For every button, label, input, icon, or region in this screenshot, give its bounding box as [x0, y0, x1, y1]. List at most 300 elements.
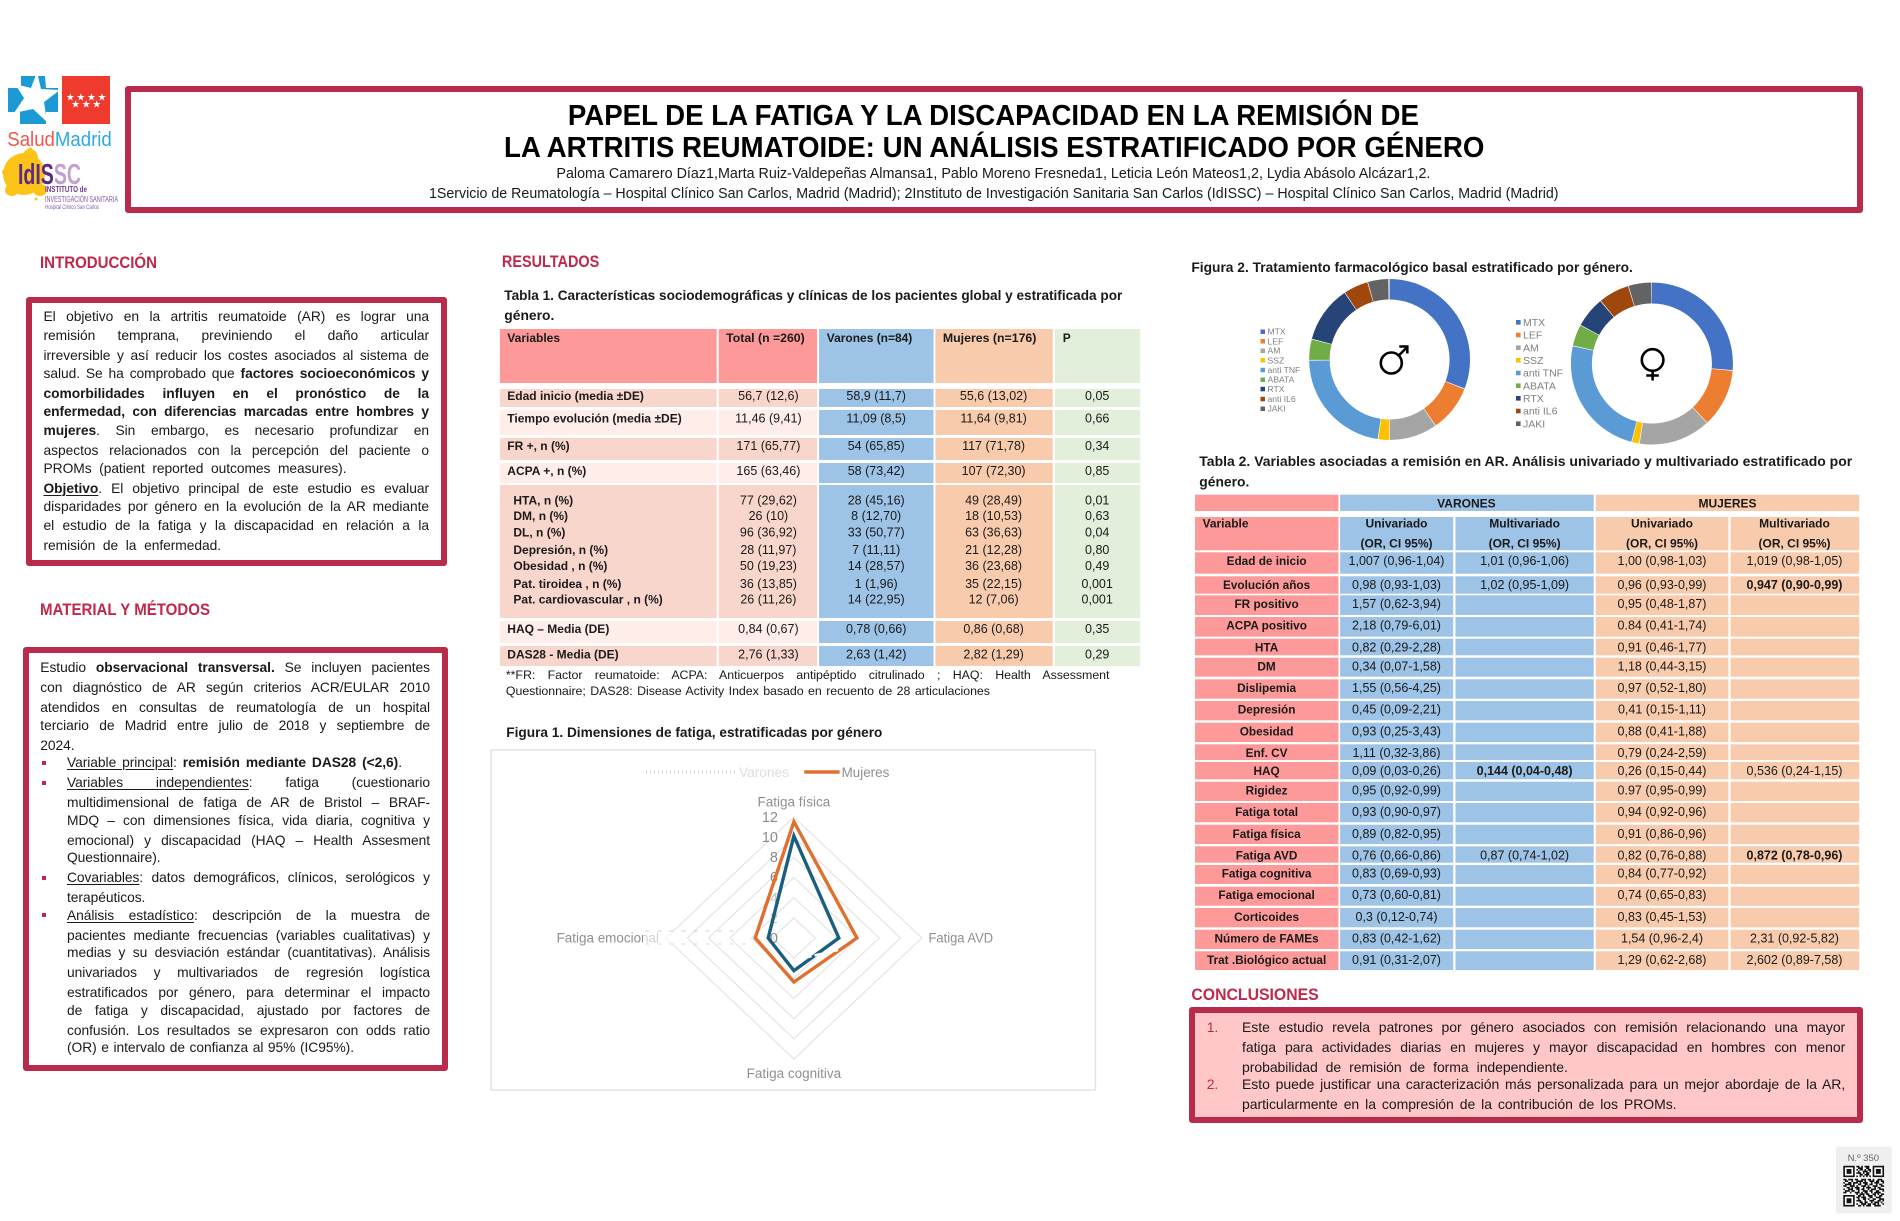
- row: ACPA: 107 (72,30): [962, 464, 1026, 478]
- row: evolución años: 1,02 (0,95-1,09): [1480, 578, 1569, 592]
- chart: female donut: [1516, 282, 1733, 444]
- row: fatiga AVD: Fatiga AVD: [1236, 848, 1298, 862]
- table 2 group header: [1195, 495, 1859, 511]
- panel: introducción: el estudio de la fatiga y la discapacidad en relación a la: [44, 518, 429, 533]
- row: ACPA positivo: 0.84 (0,41-1,74): [1618, 618, 1706, 632]
- panel: conclusiones: 1.: [1207, 1019, 1218, 1035]
- logo wordmark: SaludMadrid: [7, 129, 112, 151]
- row: enf CV: 0,79 (0,24-2,59): [1618, 746, 1706, 760]
- radar axis values: 2: [770, 911, 778, 927]
- table 2 group header: VARONES: [1437, 496, 1496, 510]
- chart frame: [491, 750, 1096, 1090]
- row: HTA: 0,91 (0,46-1,77): [1618, 640, 1706, 654]
- heading: introducción: INTRODUCCIÓN: [40, 253, 157, 272]
- row: DM: [1195, 658, 1859, 677]
- institute name: [45, 185, 118, 211]
- row: edad de inicio: 1,01 (0,96-1,06): [1480, 554, 1569, 568]
- row: edad de inicio: [1195, 552, 1859, 574]
- panel: material y métodos: Variable principal: remisión mediante DAS28 (<2,6).: [67, 755, 402, 770]
- row: evolución años: 0,947 (0,90-0,99): [1747, 578, 1842, 592]
- radar axis values: [762, 810, 778, 947]
- row: FR positivo: FR positivo: [1234, 597, 1299, 611]
- row: corticoides: [1195, 908, 1859, 927]
- row: tratamiento biológico: 0,91 (0,31-2,07): [1352, 953, 1441, 967]
- row: DAS28: 0,29: [1085, 648, 1109, 662]
- table 2 column header: [1195, 516, 1859, 550]
- row: fatiga AVD: 0,87 (0,74-1,02): [1480, 848, 1569, 862]
- category labels: Fatiga emocional: [557, 930, 659, 946]
- panel: material y métodos: atendidos en consultas de reumatología de un hospital: [40, 700, 430, 715]
- panel: material y métodos: Estudio observacional transversal. Se incluyen pacientes: [40, 660, 430, 675]
- legend female: anti IL6: [1523, 406, 1558, 418]
- title: [504, 98, 1484, 164]
- row: fatiga física: [1195, 825, 1859, 844]
- panel: conclusiones: 2.: [1207, 1076, 1218, 1092]
- row: comorbilidades: 14 (28,57): [848, 559, 905, 573]
- row: HAQ: 0,09 (0,03-0,26): [1352, 764, 1441, 778]
- row: evolución años: Evolución años: [1223, 578, 1311, 592]
- heading: tabla 1: Tabla 1. Características sociodemográficas y clínicas de los pacientes global y estratificada por: [504, 288, 1123, 303]
- panel: conclusiones: fatiga para actividades diarias en mujeres y mayor discapacidad en hombres con menor: [1242, 1039, 1845, 1055]
- row: ACPA: 0,85: [1085, 464, 1109, 478]
- logo: Salud Madrid: [7, 76, 112, 151]
- row: HAQ: [1195, 762, 1859, 779]
- title and authors: [429, 98, 1558, 202]
- legend female: AM: [1523, 342, 1539, 354]
- title: LA ARTRITIS REUMATOIDE: UN ANÁLISIS ESTRATIFICADO POR GÉNERO: [504, 130, 1484, 164]
- row: comorbilidades: 35 (22,15): [965, 577, 1022, 591]
- icon: female symbol: [1642, 349, 1663, 380]
- row: número de FAMEs: [1195, 930, 1859, 949]
- row: fatiga total: 0,94 (0,92-0,96): [1618, 805, 1706, 819]
- row: edad inicio: 0,05: [1085, 389, 1109, 403]
- row: HAQ: 0,78 (0,66): [846, 622, 906, 636]
- row: comorbilidades: Obesidad , n (%): [513, 559, 607, 573]
- row: DAS28: 2,82 (1,29): [963, 648, 1024, 662]
- icon: blue cross with star: [8, 72, 60, 124]
- series: mujeres: [755, 822, 857, 982]
- row: comorbilidades: 28 (45,16): [848, 494, 905, 508]
- row: comorbilidades: 14 (22,95): [848, 592, 905, 606]
- row: fatiga física: 0,89 (0,82-0,95): [1352, 827, 1441, 841]
- row: comorbilidades: 0,01: [1085, 494, 1109, 508]
- panel: material y métodos: Análisis estadístico: descripción de la muestra de: [67, 908, 430, 923]
- row: FR: 171 (65,77): [736, 439, 800, 453]
- row: fatiga AVD: 0,82 (0,76-0,88): [1618, 848, 1706, 862]
- legend: Mujeres: [842, 765, 890, 780]
- legend: [646, 765, 890, 780]
- donut segments female: [1581, 293, 1722, 434]
- table 1 header row: Total (n =260): [726, 331, 805, 345]
- title banner: [125, 86, 1863, 213]
- table 1 header row: Varones (n=84): [827, 331, 912, 345]
- panel: material y métodos: Covariables: datos demográficos, clínicos, serológicos y: [67, 870, 430, 885]
- row: depresión: 0,45 (0,09-2,21): [1352, 702, 1441, 716]
- heading: figura 1: Figura 1. Dimensiones de fatiga, estratificadas por género: [506, 725, 882, 740]
- row: comorbilidades: Pat. cardiovascular , n (%): [513, 592, 663, 606]
- row: dislipemia: Dislipemia: [1237, 681, 1297, 695]
- panel: conclusiones: Este estudio revela patrones por género asociados con remisión relacionando una mayor: [1242, 1019, 1845, 1035]
- row: edad de inicio: 1,007 (0,96-1,04): [1349, 554, 1444, 568]
- row: comorbilidades: 49 (28,49): [965, 494, 1022, 508]
- table 1 header row: Variables: [507, 331, 560, 345]
- row: dislipemia: 1,55 (0,56-4,25): [1352, 681, 1441, 695]
- icon: yellow splash: [2, 148, 47, 200]
- row: ACPA: [500, 463, 1140, 483]
- row: tratamiento biológico: 2,602 (0,89-7,58): [1747, 953, 1842, 967]
- row: edad de inicio: 1,00 (0,98-1,03): [1618, 554, 1706, 568]
- category labels: Fatiga AVD: [928, 930, 993, 946]
- panel: conclusiones: particularmente en la compresión de la contribución de los PROMs.: [1242, 1096, 1676, 1112]
- row: número de FAMEs: 0,83 (0,42-1,62): [1352, 932, 1441, 946]
- row: HTA: HTA: [1255, 640, 1279, 654]
- institute name: INVESTIGACIÓN SANITARIA: [45, 194, 118, 204]
- table 1 footnote: Questionnaire; DAS28: Disease Activity Index basado en recuento de 28 articulaciones: [506, 684, 990, 698]
- row: edad inicio: 55,6 (13,02): [960, 389, 1027, 403]
- heading: conclusiones: CONCLUSIONES: [1191, 986, 1319, 1004]
- table 2 column header: (OR, CI 95%): [1360, 536, 1433, 550]
- table 1 footnote: [506, 668, 1110, 698]
- legend female: anti TNF: [1523, 368, 1563, 380]
- legend male: AM: [1268, 346, 1280, 356]
- title: PAPEL DE LA FATIGA Y LA DISCAPACIDAD EN LA REMISIÓN DE: [568, 98, 1419, 132]
- legend male: [1260, 327, 1300, 414]
- row: edad de inicio: 1,019 (0,98-1,05): [1747, 554, 1842, 568]
- row: comorbilidades: 26 (10): [749, 509, 788, 523]
- series: varones: [768, 836, 839, 971]
- row: tiempo evolución: 11,46 (9,41): [735, 412, 802, 426]
- row: fatiga cognitiva: Fatiga cognitiva: [1222, 866, 1312, 880]
- legend female: SSZ: [1523, 355, 1544, 367]
- panel: introducción: disparidades por género en la evolución de la AR mediante: [44, 499, 429, 514]
- row: comorbilidades: 63 (36,63): [965, 526, 1022, 540]
- panel: introducción: aspectos relacionados con la percepción del paciente o: [44, 443, 429, 458]
- row: comorbilidades: 21 (12,28): [965, 543, 1022, 557]
- panel: material y métodos: medias y su desviación estándar (cuantitativas). Análisis: [67, 945, 430, 960]
- row: obesidad: Obesidad: [1240, 724, 1293, 738]
- row: depresión: Depresión: [1238, 702, 1295, 716]
- row: depresión: 0,41 (0,15-1,11): [1618, 702, 1706, 716]
- table 2 group header: MUJERES: [1698, 496, 1757, 510]
- row: HAQ: 0,536 (0,24-1,15): [1747, 764, 1842, 778]
- table 2 column header: Univariado: [1631, 516, 1693, 530]
- panel: introducción: [26, 297, 447, 566]
- row: rigidez: 0.97 (0,95-0,99): [1618, 784, 1706, 798]
- legend female: LEF: [1523, 330, 1542, 342]
- logo: IdISSC: [2, 148, 118, 211]
- row: comorbilidades: 12 (7,06): [969, 592, 1019, 606]
- panel: material y métodos: confusión. Los resultados se expresaron con odds ratio: [67, 1023, 430, 1038]
- radar axis values: 8: [770, 850, 778, 866]
- row: tiempo evolución: Tiempo evolución (media ±DE): [507, 412, 682, 426]
- icon: red flag with stars: ★★★: [71, 100, 103, 110]
- row: DAS28: [500, 646, 1140, 666]
- row: FR: 0,34: [1085, 439, 1109, 453]
- row: rigidez: 0,95 (0,92-0,99): [1352, 784, 1441, 798]
- row: DAS28: 2,76 (1,33): [738, 648, 799, 662]
- logo wordmark: IdISSC: [18, 159, 81, 191]
- row: número de FAMEs: Número de FAMEs: [1214, 932, 1319, 946]
- row: comorbilidades: 36 (13,85): [740, 577, 797, 591]
- table 2 column header: Variable: [1202, 516, 1249, 530]
- row: evolución años: 0,96 (0,93-0,99): [1618, 578, 1706, 592]
- row: ACPA positivo: ACPA positivo: [1226, 618, 1307, 632]
- row: comorbilidades: 96 (36,92): [740, 526, 797, 540]
- panel: material y métodos: de fatiga y discapacidad, ajustado por factores de: [67, 1003, 430, 1018]
- radar axis values: 10: [762, 830, 778, 846]
- row: fatiga emocional: Fatiga emocional: [1218, 888, 1315, 902]
- row: comorbilidades: 77 (29,62): [740, 494, 797, 508]
- panel: material y métodos: (OR) e intervalo de confianza al 95% (IC95%).: [67, 1040, 354, 1055]
- row: HAQ: 0,35: [1085, 622, 1109, 636]
- row: comorbilidades: Pat. tiroidea , n (%): [513, 577, 621, 591]
- row: enf CV: Enf. CV: [1246, 746, 1288, 760]
- row: tratamiento biológico: [1195, 951, 1859, 970]
- row: evolución años: [1195, 576, 1859, 594]
- row: HAQ: 0,84 (0,67): [738, 622, 799, 636]
- legend female: RTX: [1523, 393, 1544, 405]
- heading: figura 2: Figura 2. Tratamiento farmacológico basal estratificado por género.: [1191, 260, 1633, 275]
- radar axis values: 0: [770, 931, 778, 947]
- row: FR positivo: 1,57 (0,62-3,94): [1352, 597, 1441, 611]
- row: corticoides: Corticoides: [1234, 910, 1299, 924]
- row: tiempo evolución: 11,09 (8,5): [846, 412, 906, 426]
- legend female: [1516, 317, 1563, 430]
- chart: male donut: [1260, 279, 1470, 440]
- icon: red flag with stars: [62, 76, 110, 124]
- row: edad inicio: Edad inicio (media ±DE): [507, 389, 644, 403]
- row: enf CV: [1195, 744, 1859, 760]
- row: DM: 0,34 (0,07-1,58): [1352, 660, 1441, 674]
- row: comorbilidades: 0,001: [1082, 577, 1113, 591]
- row: fatiga física: 0,91 (0,86-0,96): [1618, 827, 1706, 841]
- table 1 header row: Mujeres (n=176): [943, 331, 1036, 345]
- radar axis values: 12: [762, 810, 778, 826]
- icon: red flag with stars: ★★★★: [66, 92, 108, 104]
- row: tiempo evolución: 0,66: [1085, 412, 1109, 426]
- panel: introducción: irreversible y así reducir los costes asociados al sistema de: [44, 348, 429, 363]
- category labels: [557, 794, 993, 1081]
- heading: material y métodos: MATERIAL Y MÉTODOS: [40, 600, 210, 619]
- legend female: MTX: [1523, 317, 1545, 329]
- institute name: Hospital Clínico San Carlos: [45, 205, 99, 211]
- panel: introducción: comorbilidades influyen en el pronóstico de la: [44, 386, 429, 401]
- donut segments male: [1319, 289, 1460, 430]
- row: HAQ: 0,144 (0,04-0,48): [1477, 764, 1573, 778]
- panel: introducción: salud. Se ha comprobado que factores socioeconómicos y: [44, 366, 429, 381]
- QR code: [1843, 1166, 1884, 1206]
- row: comorbilidades: 0,80: [1085, 543, 1109, 557]
- row: fatiga emocional: 0,74 (0,65-0,83): [1618, 888, 1706, 902]
- row: dislipemia: 0,97 (0,52-1,80): [1618, 681, 1706, 695]
- row: DAS28: DAS28 - Media (DE): [507, 648, 619, 662]
- row: comorbilidades: 8 (12,70): [851, 509, 901, 523]
- row: corticoides: 0,83 (0,45-1,53): [1618, 910, 1706, 924]
- table 1 footnote: **FR: Factor reumatoide: ACPA: Anticuerpos antipéptido citrulinado ; HAQ: Health Assessment: [506, 668, 1109, 682]
- row: comorbilidades: 28 (11,97): [740, 543, 796, 557]
- row: obesidad: [1195, 723, 1859, 742]
- legend male: ABATA: [1268, 375, 1295, 385]
- row: fatiga cognitiva: 0,84 (0,77-0,92): [1618, 866, 1706, 880]
- row: evolución años: 0,98 (0,93-1,03): [1352, 578, 1441, 592]
- panel: conclusiones: probabilidad de remisión de forma independiente.: [1242, 1059, 1568, 1075]
- row: comorbilidades: 36 (23,68): [965, 559, 1022, 573]
- heading: resultados: RESULTADOS: [502, 253, 599, 271]
- row: FR positivo: 0,95 (0,48-1,87): [1618, 597, 1706, 611]
- legend female: ABATA: [1523, 380, 1556, 392]
- radar axis values: 6: [770, 870, 778, 886]
- panel: material y métodos: univariados y multivariados de regresión logística: [67, 965, 430, 980]
- row: edad inicio: 58,9 (11,7): [846, 389, 906, 403]
- row: comorbilidades: 26 (11,26): [740, 592, 796, 606]
- panel: material y métodos: terciario de Madrid entre julio de 2018 y septiembre de: [40, 718, 430, 733]
- row: FR: 54 (65,85): [848, 439, 905, 453]
- row: HAQ: 0,26 (0,15-0,44): [1618, 764, 1706, 778]
- row: tratamiento biológico: Trat .Biológico actual: [1207, 953, 1326, 967]
- row: tiempo evolución: 11,64 (9,81): [960, 412, 1027, 426]
- row: número de FAMEs: 2,31 (0,92-5,82): [1750, 932, 1839, 946]
- category labels: Fatiga cognitiva: [747, 1066, 842, 1081]
- legend male: MTX: [1268, 327, 1286, 337]
- row: ACPA: 165 (63,46): [736, 464, 800, 478]
- icon: male symbol: [1381, 346, 1407, 374]
- row: FR positivo: [1195, 595, 1859, 615]
- row: comorbilidades: 0,001: [1082, 592, 1113, 606]
- panel: introducción: remisión de la enfermedad.: [44, 538, 221, 553]
- row: comorbilidades: Depresión, n (%): [513, 543, 608, 557]
- row: número de FAMEs: 1,54 (0,96-2,4): [1621, 932, 1703, 946]
- panel: conclusiones: [1189, 1007, 1863, 1123]
- institute name: INSTITUTO de: [45, 185, 87, 194]
- row: rigidez: Rigidez: [1246, 784, 1288, 798]
- poster number: N.º 350: [1848, 1153, 1879, 1164]
- heading: tabla 1: género.: [504, 308, 554, 323]
- panel: introducción: Objetivo. El objetivo principal de este estudio es evaluar: [44, 481, 429, 496]
- panel: introducción: mujeres. Sin embargo, es necesario profundizar en: [44, 423, 429, 438]
- row: enf CV: 1,11 (0,32-3,86): [1352, 746, 1441, 760]
- heading: tabla 2: Tabla 2. Variables asociadas a remisión en AR. Análisis univariado y multivariado estratificado por: [1199, 454, 1853, 469]
- radar grid: [666, 817, 922, 1059]
- row: obesidad: 0,88 (0,41-1,88): [1618, 724, 1706, 738]
- row: fatiga AVD: [1195, 846, 1859, 863]
- panel: conclusiones: Esto puede justificar una caracterización más personalizada para un mejor abordaje de la AR,: [1242, 1076, 1845, 1092]
- heading: tabla 1: [504, 288, 1123, 323]
- row: comorbilidades: [500, 485, 1140, 618]
- table 1 header row: P: [1063, 331, 1071, 345]
- table 1 header row: [500, 329, 1140, 383]
- table 2 column header: Multivariado: [1759, 516, 1830, 530]
- row: HTA: 0,82 (0,29-2,28): [1352, 640, 1441, 654]
- row: edad inicio: 56,7 (12,6): [738, 389, 799, 403]
- legend female: JAKI: [1523, 418, 1545, 430]
- row: tratamiento biológico: 1,29 (0,62-2,68): [1618, 953, 1706, 967]
- panel: material y métodos: con diagnóstico de AR según criterios ACR/EULAR 2010: [40, 680, 430, 695]
- row: comorbilidades: HTA, n (%): [513, 494, 573, 508]
- row: comorbilidades: 33 (50,77): [848, 526, 905, 540]
- row: HAQ: HAQ – Media (DE): [507, 622, 609, 636]
- row: DAS28: 2,63 (1,42): [846, 648, 906, 662]
- row: HAQ: HAQ: [1253, 764, 1280, 778]
- row: fatiga total: Fatiga total: [1235, 805, 1298, 819]
- legend male: anti TNF: [1268, 365, 1300, 375]
- row: edad de inicio: Edad de inicio: [1227, 554, 1307, 568]
- radar axis values: 4: [770, 891, 778, 907]
- row: HTA: [1195, 639, 1859, 655]
- row: fatiga física: Fatiga física: [1233, 827, 1301, 841]
- authors: Paloma Camarero Díaz1,Marta Ruiz-Valdepeñas Almansa1, Pablo Moreno Fresneda1, Leticia León Mateos1,2, Lydia Abásolo Alcázar1,2.: [556, 166, 1430, 182]
- row: comorbilidades: DM, n (%): [513, 509, 568, 523]
- panel: material y métodos: multidimensional de fatiga de AR de Bristol – BRAF-: [67, 795, 430, 810]
- row: fatiga total: [1195, 803, 1859, 822]
- row: fatiga cognitiva: [1195, 865, 1859, 884]
- panel: introducción: remisión temprana, previniendo el daño articular: [44, 328, 429, 343]
- label glitch: [643, 928, 750, 948]
- panel: introducción: El objetivo en la artritis reumatoide (AR) es lograr una: [44, 309, 429, 324]
- table 2 column header: (OR, CI 95%): [1626, 536, 1698, 550]
- table 2 column header: Univariado: [1365, 516, 1428, 530]
- panel: material y métodos: MDQ – con dimensiones física, vida diaria, cognitiva y: [67, 813, 430, 828]
- heading: tabla 2: género.: [1199, 474, 1249, 490]
- legend male: JAKI: [1268, 404, 1286, 414]
- row: HAQ: 0,86 (0,68): [963, 622, 1024, 636]
- row: tiempo evolución: [500, 410, 1140, 435]
- row: fatiga total: 0,93 (0,90-0,97): [1352, 805, 1441, 819]
- row: fatiga cognitiva: 0,83 (0,69-0,93): [1352, 866, 1441, 880]
- row: fatiga emocional: [1195, 887, 1859, 906]
- legend male: LEF: [1268, 336, 1283, 346]
- row: HAQ: [500, 621, 1140, 643]
- row: fatiga emocional: 0,73 (0,60-0,81): [1352, 888, 1441, 902]
- row: dislipemia: [1195, 679, 1859, 699]
- affiliations: 1Servicio de Reumatología – Hospital Clínico San Carlos, Madrid (Madrid); 2Instituto de Investigación Sanitaria San Carlos (IdISSC) – Hospital Clínico San Carlos, Madrid (Madrid): [429, 186, 1558, 202]
- row: FR: FR +, n (%): [507, 439, 570, 453]
- row: comorbilidades: 0,63: [1085, 509, 1109, 523]
- table 2 column header: (OR, CI 95%): [1489, 536, 1561, 550]
- row: obesidad: 0,93 (0,25-3,43): [1352, 724, 1441, 738]
- row: ACPA: 58 (73,42): [848, 464, 905, 478]
- panel: material y métodos: emocional) y discapacidad (HAQ – Health Assesment: [67, 833, 430, 848]
- panel: material y métodos: [23, 647, 448, 1071]
- heading: tabla 2: [1199, 454, 1853, 490]
- panel: material y métodos: terapéuticos.: [67, 890, 145, 905]
- row: comorbilidades: 1 (1,96): [855, 577, 898, 591]
- panel: material y métodos: pacientes mediante frecuencias (variables cualitativas) y: [67, 928, 430, 943]
- row: fatiga AVD: 0,872 (0,78-0,96): [1747, 848, 1842, 862]
- row: comorbilidades: 0,49: [1085, 559, 1109, 573]
- panel: material y métodos: 2024.: [40, 738, 75, 753]
- row: comorbilidades: 7 (11,11): [852, 543, 900, 557]
- row: comorbilidades: 50 (19,23): [740, 559, 797, 573]
- row: edad inicio: [500, 389, 1140, 407]
- legend male: SSZ: [1268, 355, 1284, 365]
- row: fatiga AVD: 0,76 (0,66-0,86): [1352, 848, 1441, 862]
- category labels: Fatiga física: [758, 794, 831, 810]
- row: corticoides: 0,3 (0,12-0,74): [1356, 910, 1438, 924]
- row: comorbilidades: 0,04: [1085, 526, 1109, 540]
- legend: Varones: [739, 765, 789, 780]
- row: DM: DM: [1257, 660, 1276, 674]
- panel: material y métodos: estratificados por género, para determinar el impacto: [67, 985, 430, 1000]
- panel: introducción: enfermedad, con diferencias marcadas entre hombres y: [44, 404, 429, 419]
- table 2 column header: Multivariado: [1489, 516, 1560, 530]
- panel: material y métodos: Variables independientes: fatiga (cuestionario: [67, 775, 430, 790]
- table 2 column header: (OR, CI 95%): [1758, 536, 1831, 550]
- row: ACPA positivo: [1195, 617, 1859, 637]
- panel: material y métodos: Questionnaire).: [67, 850, 161, 865]
- row: rigidez: [1195, 782, 1859, 801]
- row: ACPA positivo: 2,18 (0,79-6,01): [1352, 618, 1441, 632]
- render glitch on series: [795, 950, 838, 960]
